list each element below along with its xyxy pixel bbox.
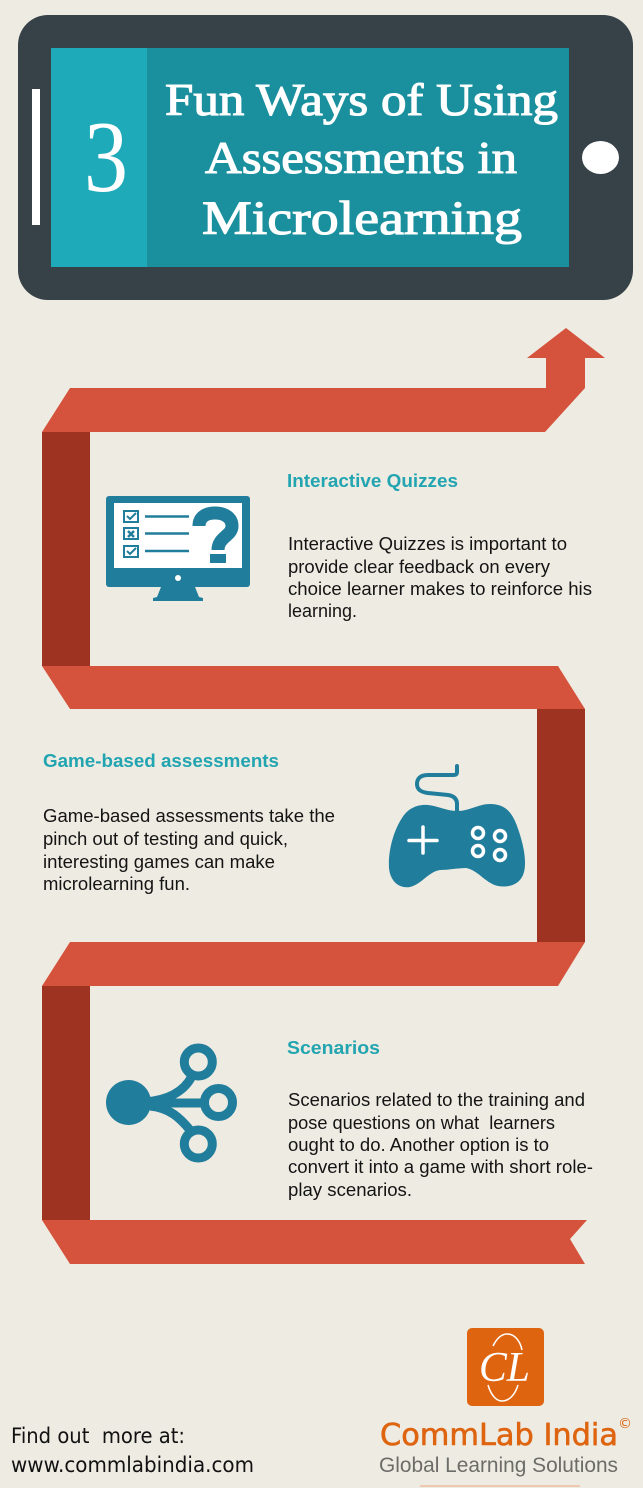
phone home button	[582, 141, 619, 174]
title: Fun Ways of Using	[165, 75, 558, 125]
text: game-based assessments: microlearning fun.	[43, 874, 190, 894]
left fold 2	[42, 986, 90, 1220]
arrow and top ribbon	[42, 328, 605, 432]
phone body	[18, 15, 633, 300]
heading: scenarios: Scenarios	[287, 1038, 380, 1058]
left fold 1	[42, 432, 90, 666]
title: Assessments in	[205, 133, 517, 183]
header: phone with title	[18, 15, 633, 300]
icon: monitor quiz	[106, 496, 250, 601]
text: interactive quizzes: choice learner makes to reinforce his	[288, 579, 592, 599]
logo name: CommLab India	[380, 1418, 618, 1453]
heading: game-based assessments: Game-based assessments	[43, 751, 279, 771]
text: interactive quizzes: learning.	[288, 601, 357, 621]
number 3: 3	[84, 101, 128, 214]
text: game-based assessments: Game-based assessments take the	[43, 806, 335, 826]
text: scenarios: play scenarios.	[288, 1180, 412, 1200]
logo tagline: Global Learning Solutions	[379, 1454, 618, 1477]
footer: find out more: www.commlabindia.com	[11, 1453, 254, 1477]
text: interactive quizzes: Interactive Quizzes is important to	[288, 534, 567, 554]
ribbon path with arrow	[42, 328, 605, 1264]
logo: commlab india	[379, 1328, 632, 1487]
footer: find out more: Find out more at:	[11, 1424, 185, 1448]
phone speaker bar	[32, 89, 40, 225]
icon: branching scenario	[106, 1048, 232, 1158]
bottom ribbon	[42, 1220, 587, 1264]
footer: find out more	[11, 1424, 254, 1477]
text: game-based assessments: interesting games can make	[43, 852, 275, 872]
text: scenarios: pose questions on what learners	[288, 1113, 555, 1133]
middle ribbon 1	[42, 666, 585, 709]
logo mark	[467, 1328, 544, 1406]
middle ribbon 2	[42, 942, 585, 986]
icon: game controller	[389, 766, 525, 887]
right fold	[537, 709, 585, 942]
text: scenarios	[288, 1090, 593, 1200]
copyright: ©	[618, 1416, 632, 1432]
text: scenarios: ought to do. Another option is to	[288, 1135, 549, 1155]
heading: interactive quizzes: Interactive Quizzes	[287, 471, 458, 491]
phone screen	[51, 48, 569, 267]
number panel	[51, 48, 147, 267]
text: scenarios: convert it into a game with short role-	[288, 1157, 593, 1177]
text: interactive quizzes	[288, 534, 592, 621]
logo: commlab india: CL	[479, 1345, 530, 1391]
text: game-based assessments: pinch out of testing and quick,	[43, 829, 288, 849]
title	[165, 75, 558, 245]
text: game-based assessments	[43, 806, 335, 894]
text: scenarios: Scenarios related to the training and	[288, 1090, 585, 1110]
text: interactive quizzes: provide clear feedback on every	[288, 557, 550, 577]
title: Microlearning	[202, 192, 522, 245]
